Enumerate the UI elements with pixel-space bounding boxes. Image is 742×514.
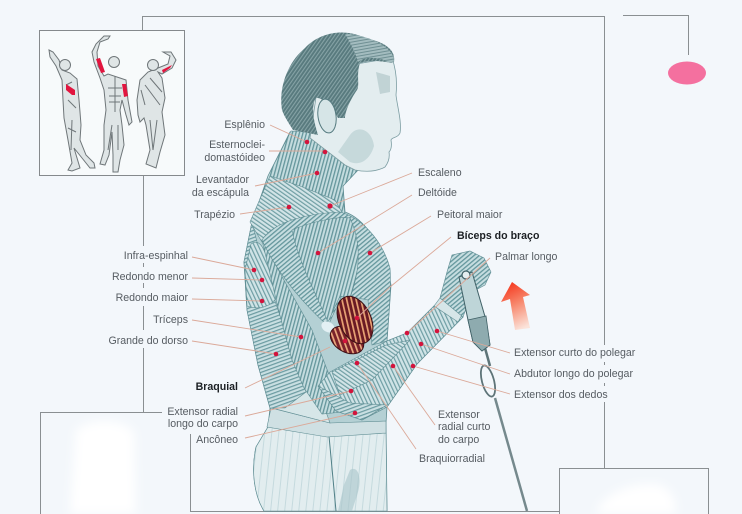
trapezius (250, 176, 344, 242)
label: Deltóide (316, 187, 457, 255)
belt (267, 408, 386, 437)
label: Ancôneo: Ancôneo (196, 434, 238, 446)
label: Trapézio: Trapézio (194, 209, 235, 221)
hair (281, 33, 394, 135)
figure: right, rear three-quarter view (137, 52, 176, 168)
highlight: red upper arm (122, 84, 128, 97)
figure: centre, front view (92, 36, 132, 172)
label: Infra-espinhal: Infra-espinhal (124, 250, 188, 262)
label: Grande do dorso (108, 335, 278, 356)
biceps upper head (330, 291, 380, 349)
pants shading (338, 469, 360, 511)
label: Extensor dos dedos (411, 364, 608, 401)
hand (440, 251, 491, 317)
elbow highlight (319, 319, 337, 335)
figure: left, back view (49, 50, 95, 171)
upper cable (485, 348, 490, 366)
label: Braquiorradial (355, 361, 485, 465)
label: Braquial (196, 347, 330, 393)
label: Esternocleidomastóideo (204, 139, 327, 164)
label: Palmar longo: Palmar longo (495, 251, 558, 263)
label: Peitoral maior: Peitoral maior (437, 209, 503, 221)
pants (254, 427, 387, 511)
brachioradialis (332, 340, 410, 395)
label: Ancôneo (196, 411, 357, 446)
label: Extensor curto do polegar: Extensor curto do polegar (514, 347, 636, 359)
wrist band (434, 298, 463, 322)
forearm (318, 287, 463, 420)
label: Extensor radial curto do carpo: do carpo (438, 434, 479, 446)
label: Extensor radial curto do carpo: radial curto (438, 421, 491, 433)
label: Braquiorradial: Braquiorradial (419, 453, 485, 465)
label: Grande do dorso: Grande do dorso (108, 335, 188, 347)
label: Braquial: Braquial (196, 381, 238, 393)
highlight: red forearm (162, 65, 172, 73)
handle pin (462, 271, 470, 279)
label: Bíceps do braço (343, 230, 540, 343)
label: Abdutor longo do polegar (419, 342, 633, 380)
panel: inset with three small figures (40, 30, 184, 176)
lower arm anconeus (318, 386, 387, 420)
label: Palmar longo (405, 251, 558, 335)
label: Abdutor longo do polegar: Abdutor longo do polegar (514, 368, 633, 380)
cable handle (459, 271, 527, 511)
label: Escaleno (327, 167, 462, 209)
biceps lower head (325, 321, 369, 359)
neck (258, 131, 358, 218)
label: Redondo maior (116, 292, 264, 304)
deltoid (262, 212, 390, 345)
label: Redondo maior: Redondo maior (116, 292, 188, 304)
pink marker (668, 62, 706, 84)
handle bar (459, 272, 490, 351)
handle collar (468, 316, 490, 351)
label: Esplênio: Esplênio (224, 119, 265, 131)
label: Esternocleidomastóideo: Esternoclei- (209, 139, 265, 151)
main figure: anatomical torso and arm (244, 33, 491, 511)
label: Extensor radial curto do carpo (391, 364, 491, 446)
ear (316, 98, 338, 134)
label: Peitoral maior (368, 209, 503, 255)
label: Tríceps: Tríceps (153, 314, 188, 326)
carabiner (478, 364, 498, 398)
latissimus and back (244, 222, 306, 408)
lower back skin (262, 360, 330, 423)
label: Extensor curto do polegar (435, 329, 636, 359)
highlight: red muscle (66, 84, 75, 95)
cable (495, 398, 527, 511)
label: Redondo menor (112, 271, 264, 283)
face (310, 58, 400, 171)
label: Levantador da escápula (192, 171, 319, 199)
pants centre seam (329, 436, 336, 511)
arrow: upward movement (501, 282, 530, 330)
label: Tríceps (153, 314, 303, 339)
label: Redondo menor: Redondo menor (112, 271, 188, 283)
face shading (338, 129, 374, 163)
label: Esternocleidomastóideo: domastóideo (204, 152, 265, 164)
label: Deltóide: Deltóide (418, 187, 457, 199)
label: Esplênio (224, 119, 309, 144)
label: Infra-espinhal (124, 250, 256, 272)
highlight: red forearm (96, 58, 105, 73)
label: Levantador da escápula: Levantador (196, 174, 249, 186)
hair front (345, 34, 394, 63)
deltoid central head (292, 218, 358, 322)
brow shading (376, 72, 390, 94)
label: Escaleno: Escaleno (418, 167, 462, 179)
label: Levantador da escápula: da escápula (192, 187, 249, 199)
label: Extensor radial longo do carpo: longo do carpo (168, 418, 238, 430)
label: Trapézio (194, 205, 291, 221)
infraspinatus and teres (245, 242, 278, 308)
label: Extensor radial curto do carpo: Extensor (438, 409, 480, 421)
bottom-right empty box highlight (596, 484, 676, 514)
label: Extensor radial longo do carpo (167, 389, 353, 430)
label: Extensor radial longo do carpo: Extensor radial (167, 406, 238, 418)
bottom-left empty box highlight (70, 421, 136, 514)
triceps (262, 240, 342, 414)
label: Bíceps do braço: Bíceps do braço (457, 230, 540, 242)
body silhouette base (244, 132, 463, 511)
label: Extensor dos dedos: Extensor dos dedos (514, 389, 608, 401)
